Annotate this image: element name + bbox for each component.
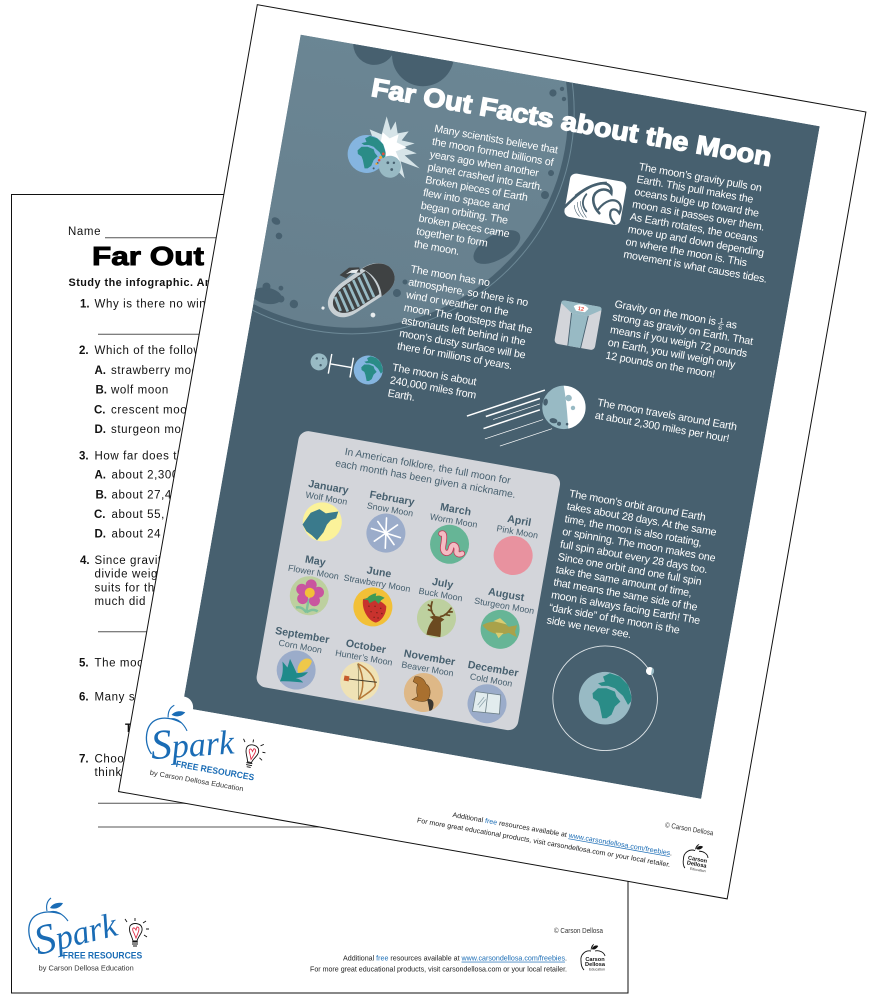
November beaver moon [394, 648, 457, 716]
text: moon formation: the moon formed billions of [431, 136, 554, 169]
question 2: Which of the following [94, 345, 220, 357]
text: orbit: takes about 28 days. At the same [566, 501, 718, 539]
April pink moon: April [506, 513, 532, 529]
resources note, front page: Additional free resources available at www.carsondellosa.com/freebies. [452, 812, 673, 858]
Carson Dellosa logo, front page: Education [690, 867, 706, 873]
name line: Name [68, 226, 101, 238]
question 4: suits for the [94, 583, 162, 595]
question 2: A. [94, 365, 106, 377]
February snow moon [359, 489, 416, 556]
text: tides: oceans bulge up toward the [633, 186, 760, 220]
text: moon formation: began orbiting. The [420, 200, 509, 227]
resources note, back page: For more great educational products, visit carsondellosa.com or your local retailer. [310, 966, 567, 973]
July buck moon: July [431, 576, 454, 591]
September corn moon: September [274, 625, 330, 646]
text: no atmosphere: there for millions of years. [396, 340, 513, 372]
back worksheet page [12, 194, 628, 993]
panel: infographic background [184, 34, 820, 799]
folklore intro: In American folklore, the full moon for [344, 447, 511, 487]
December cold moon: December [467, 659, 519, 680]
text: orbit: side we never see. [546, 614, 632, 641]
December cold moon: Cold Moon [469, 671, 513, 689]
March worm moon [422, 500, 480, 568]
question 3: about 27,4 [112, 490, 172, 502]
May flower moon: May [304, 554, 327, 569]
Carson Dellosa logo, front page [681, 842, 711, 874]
October hunter's moon: Hunter’s Moon [335, 648, 393, 668]
question 2: crescent moon [111, 404, 194, 416]
question 7: think [94, 767, 122, 779]
question 2: B. [96, 384, 107, 396]
question 5: 5. [79, 658, 89, 670]
question 3: 3. [79, 450, 89, 462]
Spark logo, back page: Spark [29, 900, 122, 965]
Spark logo, front page: by Carson Dellosa Education [149, 770, 244, 793]
Carson Dellosa logo, back page: Education [589, 968, 605, 972]
question 4: 4. [80, 555, 90, 567]
text: orbit: moon is always facing Earth! The [550, 589, 701, 627]
text: moon formation: broken pieces came [418, 213, 511, 240]
March worm moon: Worm Moon [429, 512, 478, 530]
icon: scale: 12 [577, 306, 584, 313]
Carson Dellosa logo, front page: Carson [687, 855, 708, 865]
question 3: How far does the [94, 450, 191, 462]
text: tides: move up and down depending [627, 224, 765, 259]
worksheet title: Far Out [92, 241, 204, 271]
February snow moon: February [369, 489, 415, 508]
question 4: divide weight [94, 569, 169, 581]
text: no atmosphere: wind or weather on the [404, 289, 510, 319]
October hunter's moon [328, 636, 395, 706]
text: orbit: full spin about every 28 days too. [559, 538, 708, 576]
June strawberry moon: June [366, 564, 392, 581]
question 7: 7. [79, 754, 89, 766]
text: tides: movement is what causes tides. [622, 249, 768, 286]
January wolf moon: January [307, 478, 350, 497]
question 3: C. [94, 509, 106, 521]
moon backdrop [252, 34, 575, 334]
text: tides: The moon’s gravity pulls on [638, 161, 763, 195]
white notch behind logo [169, 695, 195, 720]
text: distance: The moon is about [391, 362, 477, 388]
text: moon formation: the moon. [413, 238, 460, 258]
text: tides: moon as it passes over them. [631, 199, 765, 234]
text: moon formation: Many scientists believe that [433, 123, 559, 157]
May flower moon [281, 551, 342, 619]
February snow moon: Snow Moon [366, 500, 414, 518]
icon: speeding moon [461, 370, 589, 470]
text: no atmosphere: The moon has no [410, 263, 491, 289]
question 2: C. [94, 404, 106, 416]
question 2: D. [94, 424, 106, 436]
question 1: Why is there no wind [94, 299, 213, 311]
text: gravity: 6 [718, 325, 723, 332]
panel: full moon nicknames [255, 430, 562, 732]
Spark logo, front page: FREE RESOURCES [175, 759, 255, 782]
copyright, front page: © Carson Dellosa [664, 820, 714, 837]
October hunter's moon: October [345, 637, 387, 656]
question 6 [79, 692, 182, 735]
title: Far Out Facts about the Moon [369, 72, 774, 172]
question 4 [80, 555, 300, 632]
question 3: A. [94, 470, 106, 482]
question 4: much did [94, 596, 146, 608]
icon: boot footprint [315, 246, 407, 333]
icon: planet collision [344, 105, 430, 187]
question 6: True [125, 723, 149, 735]
front infographic page [118, 4, 866, 900]
text: gravity: 12 pounds on the moon! [605, 350, 716, 381]
November beaver moon: November [403, 648, 456, 668]
April pink moon [489, 511, 541, 578]
text: gravity: as [725, 318, 738, 332]
question 5: The moon [94, 658, 151, 670]
text: moon formation: flew into space and [422, 187, 511, 214]
text: orbit: time, the moon is also rotating, [564, 513, 703, 549]
January wolf moon [298, 478, 350, 545]
question 2: sturgeon moon [111, 424, 196, 436]
question 2: 2. [79, 345, 89, 357]
March worm moon: March [439, 501, 472, 518]
question 3 [79, 450, 191, 540]
September corn moon [266, 625, 330, 694]
question 1: 1. [80, 299, 90, 311]
question 3: about 55, [112, 509, 165, 521]
text: distance: Earth. [387, 387, 416, 404]
question 1 [80, 299, 300, 334]
text: tides: As Earth rotates, the oceans [629, 211, 758, 245]
June strawberry moon [336, 561, 413, 632]
Carson Dellosa logo, back page: Dellosa [585, 962, 606, 968]
question 2 [79, 345, 220, 436]
Spark logo, back page: FREE RESOURCES [63, 950, 142, 960]
instructions: Study the infographic. Answer [68, 277, 239, 289]
question 4: Since gravity [94, 555, 168, 567]
question 7 [79, 754, 500, 827]
icon: waves [557, 172, 628, 233]
text: orbit: that means the same side of the [552, 576, 698, 614]
text: moon formation: Broken pieces of Earth [424, 174, 529, 204]
question 7: Choose [94, 754, 138, 766]
text: gravity [605, 298, 756, 386]
Carson Dellosa logo, back page [581, 944, 606, 972]
folklore intro: each month has been given a nickname. [334, 458, 516, 501]
Spark logo, back page [29, 898, 149, 973]
text: tides: Earth. This pull makes the [636, 174, 754, 206]
icon: distance between moon and Earth [308, 344, 387, 387]
Carson Dellosa logo, back page: Carson [585, 957, 605, 963]
text: orbit: “dark side” of the moon is the [548, 602, 681, 637]
Spark logo, front page [139, 701, 271, 796]
text: orbit: or spinning. The moon makes one [561, 526, 717, 565]
text: orbit: The moon’s orbit around Earth [568, 488, 707, 524]
April pink moon: Pink Moon [496, 523, 539, 540]
text: no atmosphere: astronauts left behind in the [401, 315, 527, 348]
December cold moon [458, 659, 519, 727]
Spark logo, back page: by Carson Dellosa Education [39, 966, 134, 973]
text: orbit: take the same amount of time, [555, 564, 693, 600]
August sturgeon moon: August [487, 586, 526, 604]
icon: scale [554, 300, 602, 350]
question 3: D. [94, 528, 106, 540]
question 3: about 2,300 [112, 470, 179, 482]
text: gravity: 1 [719, 317, 724, 325]
question 3: B. [96, 490, 107, 502]
text: moon formation: years ago when another [429, 149, 540, 180]
text: orbit: Since one orbit and one full spin [557, 551, 703, 588]
July buck moon: Buck Moon [418, 586, 463, 603]
text: gravity: Gravity on the moon is [614, 298, 717, 328]
Carson Dellosa logo, front page: Dellosa [686, 860, 708, 870]
August sturgeon moon: Sturgeon Moon [474, 596, 535, 616]
text: moon formation: together to form [415, 225, 489, 250]
text: no atmosphere: moon’s dusty surface will be [398, 327, 527, 362]
question 2: wolf moon [110, 384, 169, 396]
January wolf moon: Wolf Moon [305, 490, 348, 507]
text: gravity: strong as gravity on Earth. That [611, 311, 754, 348]
question 2: strawberry moon [111, 365, 206, 377]
question 6: 6. [79, 692, 89, 704]
November beaver moon: Beaver Moon [401, 659, 454, 678]
copyright, back page: © Carson Dellosa [554, 926, 603, 935]
question 6: Many scientists [94, 692, 182, 704]
icon: moon orbit diagram [545, 638, 666, 759]
resources note, front page: For more great educational products, visit carsondellosa.com or your local retailer. [416, 817, 671, 869]
August sturgeon moon [467, 584, 537, 654]
text: no atmosphere: atmosphere, so there is no [407, 276, 529, 309]
text: speed: at about 2,300 miles per hour! [594, 410, 730, 445]
text: tides: on where the moon is. This [625, 236, 748, 269]
resources note, back page: Additional free resources available at www.carsondellosa.com/freebies . [343, 956, 567, 963]
resources note, back page [310, 956, 567, 973]
text: distance: 240,000 miles from [389, 375, 477, 402]
June strawberry moon: Strawberry Moon [343, 572, 411, 594]
September corn moon: Corn Moon [278, 638, 323, 655]
text: gravity: on Earth, you will weigh only [607, 337, 737, 371]
text: gravity: means if you weigh 72 pounds [609, 324, 748, 360]
Spark logo, front page: Spark [149, 717, 236, 769]
text: moon formation: planet crashed into Earth. [427, 161, 544, 193]
July buck moon [411, 574, 466, 641]
text: no atmosphere: moon. The footsteps that the [403, 302, 533, 336]
question 3: about 24 [112, 528, 161, 540]
May flower moon: Flower Moon [287, 563, 340, 581]
text: speed: The moon travels around Earth [596, 397, 738, 433]
